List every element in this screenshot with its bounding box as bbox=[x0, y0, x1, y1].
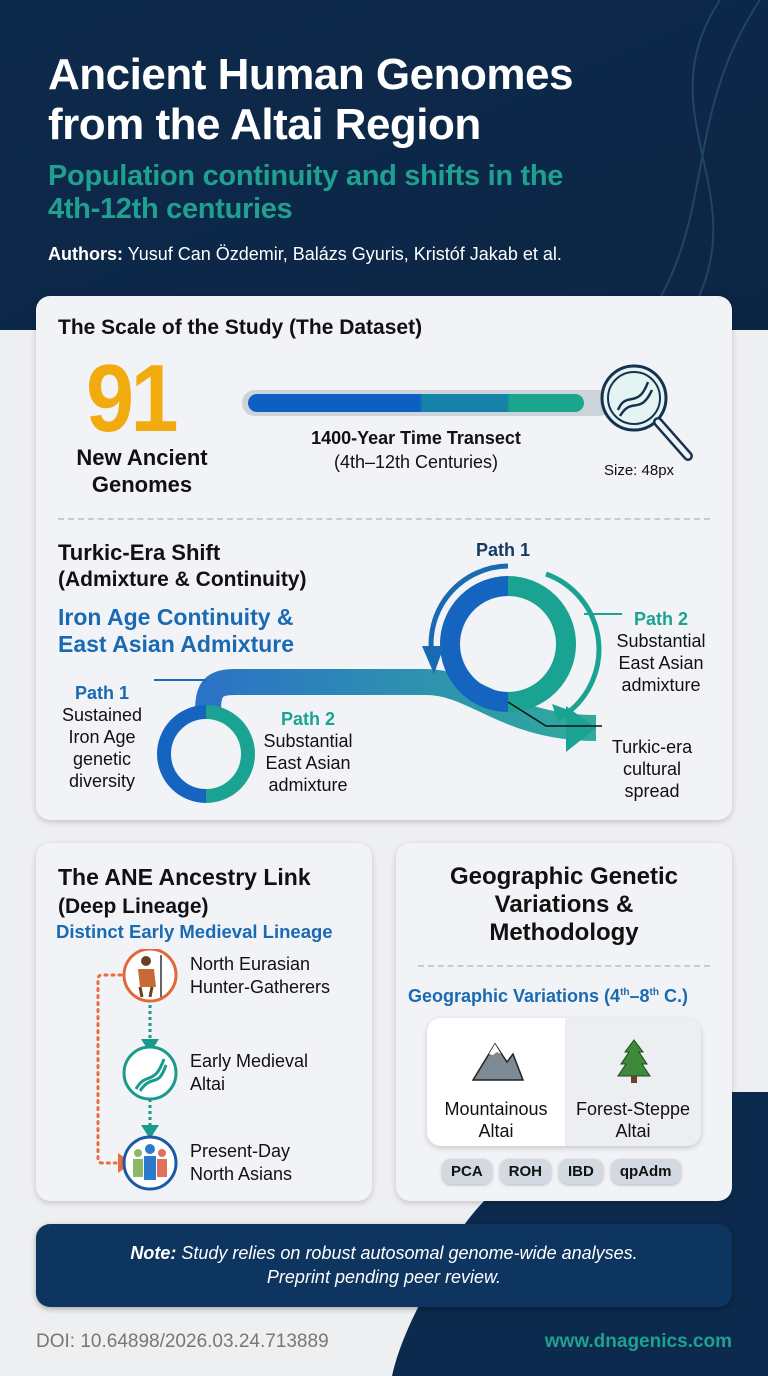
website: www.dnagenics.com bbox=[545, 1331, 732, 1352]
heading turkic-era shift bbox=[58, 540, 306, 591]
icon: magnifier dna bbox=[600, 364, 693, 461]
subheading: Geographic Variations (4th–8th C.) bbox=[408, 986, 688, 1006]
method tags bbox=[440, 1158, 683, 1187]
bar label bbox=[311, 428, 521, 472]
label early medieval altai: Early Medieval bbox=[190, 1051, 308, 1071]
DOI: DOI: 10.64898/2026.03.24.713889 bbox=[36, 1331, 329, 1352]
label path 1 left: Sustained Iron Age genetic diversity bbox=[62, 705, 142, 791]
comparison card bbox=[427, 1018, 701, 1146]
label path 2 right: Path 2 bbox=[634, 609, 688, 629]
label path 1 top: Path 1 bbox=[476, 540, 530, 560]
label path 2 right: Substantial East Asian admixture bbox=[616, 631, 706, 695]
heading: (Deep Lineage) bbox=[58, 895, 209, 918]
label mountainous: Mountainous bbox=[444, 1099, 548, 1119]
label path 2 middle: Substantial East Asian admixture bbox=[263, 731, 353, 795]
subheading bbox=[58, 604, 294, 657]
label turkic-era cultural spread: Turkic-era cultural spread bbox=[612, 737, 692, 801]
label forest-steppe: Altai bbox=[615, 1121, 650, 1141]
subheading: East Asian Admixture bbox=[58, 631, 294, 657]
heading: The Scale of the Study (The Dataset) bbox=[58, 316, 422, 339]
heading: Geographic Genetic Variations & bbox=[450, 863, 678, 918]
label NE hunter-gatherers bbox=[190, 954, 330, 997]
size caption: Size: 48px bbox=[604, 462, 674, 479]
label forest-steppe: Forest-Steppe bbox=[576, 1099, 690, 1119]
heading turkic-era shift: Turkic-Era Shift bbox=[58, 540, 220, 565]
method tags: PCA bbox=[451, 1163, 483, 1180]
panel: geographic variations bbox=[396, 843, 732, 1201]
subtitle: Population continuity and shifts in the 4th-12th centuries bbox=[48, 160, 563, 225]
heading: Methodology bbox=[489, 919, 639, 946]
label present-day: North Asians bbox=[190, 1164, 292, 1184]
bar label: (4th–12th Centuries) bbox=[334, 452, 498, 472]
label path 2 middle: Path 2 bbox=[281, 709, 335, 729]
method tags: IBD bbox=[568, 1163, 594, 1180]
heading bbox=[450, 863, 678, 946]
bar label: 1400-Year Time Transect bbox=[311, 428, 521, 448]
subheading: Distinct Early Medieval Lineage bbox=[56, 921, 333, 942]
label present-day bbox=[190, 1141, 292, 1184]
panel: scale of the study bbox=[36, 296, 732, 820]
panel: ANE ancestry link bbox=[36, 843, 372, 1201]
label early medieval altai bbox=[190, 1051, 308, 1094]
heading bbox=[58, 864, 311, 918]
label NE hunter-gatherers: Hunter-Gatherers bbox=[190, 977, 330, 997]
heading turkic-era shift: (Admixture & Continuity) bbox=[58, 568, 306, 591]
note box bbox=[36, 1224, 732, 1307]
heading: The ANE Ancestry Link bbox=[58, 864, 311, 890]
label present-day: Present-Day bbox=[190, 1141, 290, 1161]
timeline bar bbox=[242, 390, 612, 416]
method tags: qpAdm bbox=[620, 1163, 672, 1180]
label NE hunter-gatherers: North Eurasian bbox=[190, 954, 310, 974]
subheading: Iron Age Continuity & bbox=[58, 604, 294, 630]
title: Ancient Human Genomes from the Altai Region bbox=[48, 50, 573, 149]
icon: mountain bbox=[472, 1042, 524, 1081]
lineage diagram bbox=[96, 949, 178, 1190]
icon: tree bbox=[617, 1039, 651, 1083]
big number 91: 91 bbox=[86, 345, 175, 452]
label path 1 left: Path 1 bbox=[75, 683, 129, 703]
diagram: paths bbox=[154, 564, 622, 803]
label forest-steppe bbox=[576, 1099, 690, 1141]
label early medieval altai: Altai bbox=[190, 1074, 225, 1094]
authors: Authors: Yusuf Can Özdemir, Balázs Gyuris, Kristóf Jakab et al. bbox=[48, 244, 562, 264]
label mountainous bbox=[444, 1099, 548, 1141]
label mountainous: Altai bbox=[478, 1121, 514, 1141]
label new ancient genomes: New Ancient Genomes bbox=[76, 445, 208, 497]
note box: Preprint pending peer review. bbox=[267, 1267, 501, 1287]
note box: Note: Study relies on robust autosomal genome-wide analyses. bbox=[130, 1243, 638, 1263]
method tags: ROH bbox=[509, 1163, 542, 1180]
